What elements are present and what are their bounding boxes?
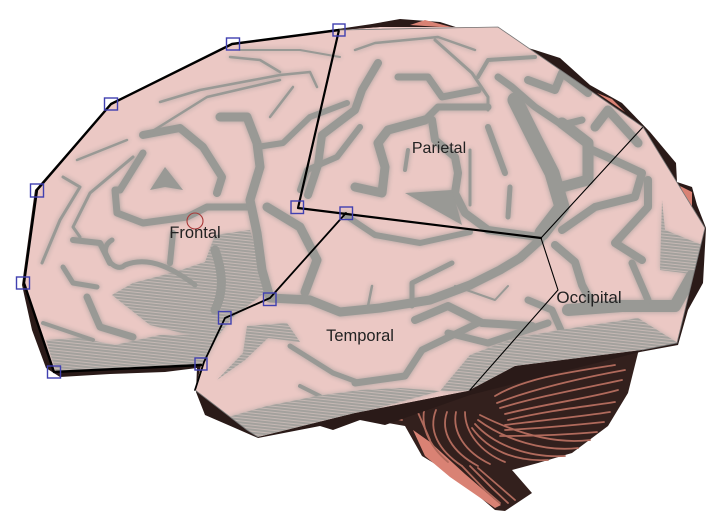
origin marker circle — [187, 213, 203, 229]
brainstem highlight — [413, 430, 501, 508]
label: Occipital: Occipital — [556, 288, 622, 307]
cerebellum and brainstem silhouette — [368, 340, 642, 511]
lobe boundary lines — [24, 27, 705, 437]
brain dark outer fringe — [22, 19, 706, 438]
brainstem fibres — [462, 466, 515, 503]
control point handles — [16, 24, 352, 378]
label: Frontal: Frontal — [169, 224, 221, 242]
panel: lobes overlay — [24, 27, 705, 437]
central line — [298, 30, 541, 238]
sulci — [42, 37, 702, 437]
cerebellum folia — [372, 365, 625, 466]
sulci: parietal lobe — [308, 37, 638, 237]
pink brain surface — [24, 27, 705, 437]
lateral line — [195, 213, 346, 390]
overlay edge — [195, 27, 705, 437]
cerebellum and brainstem — [368, 340, 642, 511]
sulci: occipital lobe — [440, 150, 702, 391]
sulci: frontal lobe — [42, 50, 360, 372]
label: Parietal: Parietal — [412, 140, 466, 157]
sulci: temporal lobe — [217, 215, 548, 437]
label: Temporal: Temporal — [326, 327, 394, 345]
occipital lines — [470, 127, 643, 390]
salmon edge accents — [410, 20, 692, 212]
frontal lobe outline — [24, 30, 339, 372]
